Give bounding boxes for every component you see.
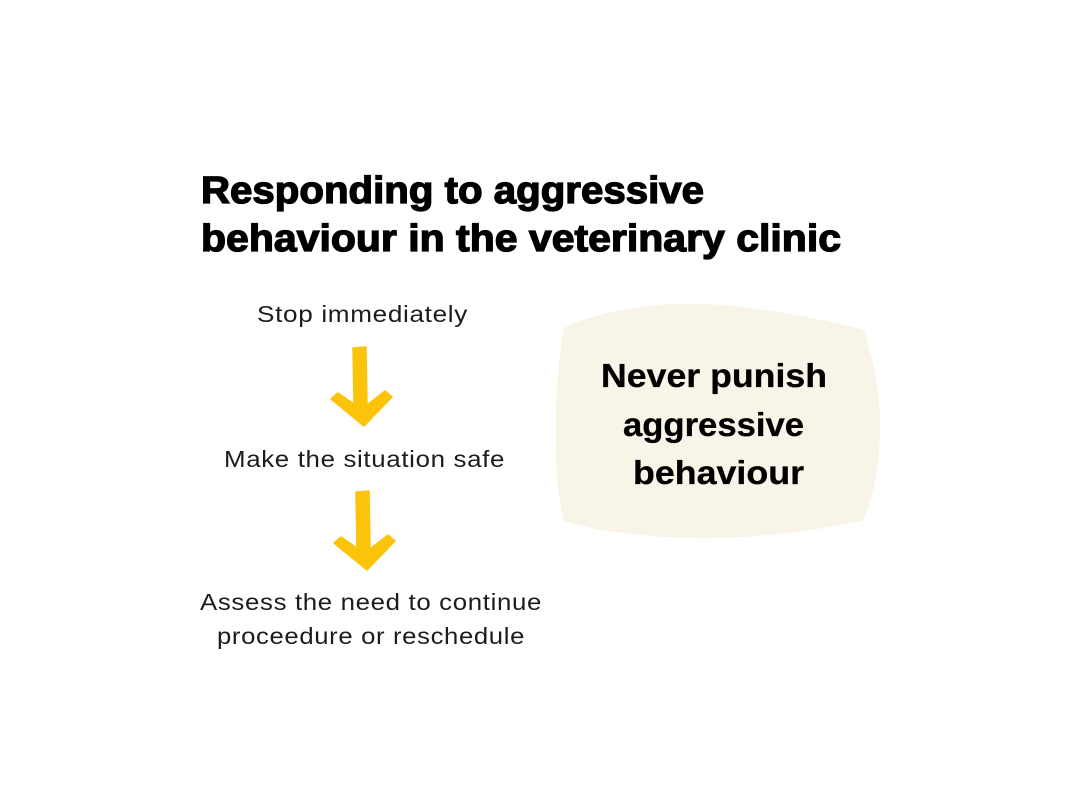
step: assess the need: proceedure or reschedule: [217, 623, 525, 649]
callout panel: never punish: [556, 304, 880, 538]
title: [201, 170, 841, 260]
step: make the situation safe: Make the situation safe: [224, 446, 505, 472]
arrow: first step down: [331, 347, 392, 426]
arrow: second step down: [334, 491, 395, 570]
step: assess the need: [200, 589, 542, 649]
title: Responding to aggressive: [201, 170, 704, 212]
step: stop immediately: Stop immediately: [257, 301, 468, 327]
step: assess the need: Assess the need to continue: [200, 589, 542, 615]
callout text: [601, 357, 827, 491]
title: behaviour in the veterinary clinic: [201, 218, 841, 260]
callout text: behaviour: [633, 454, 804, 491]
callout text: aggressive: [623, 406, 804, 443]
callout text: Never punish: [601, 357, 827, 394]
callout background: [556, 304, 880, 538]
